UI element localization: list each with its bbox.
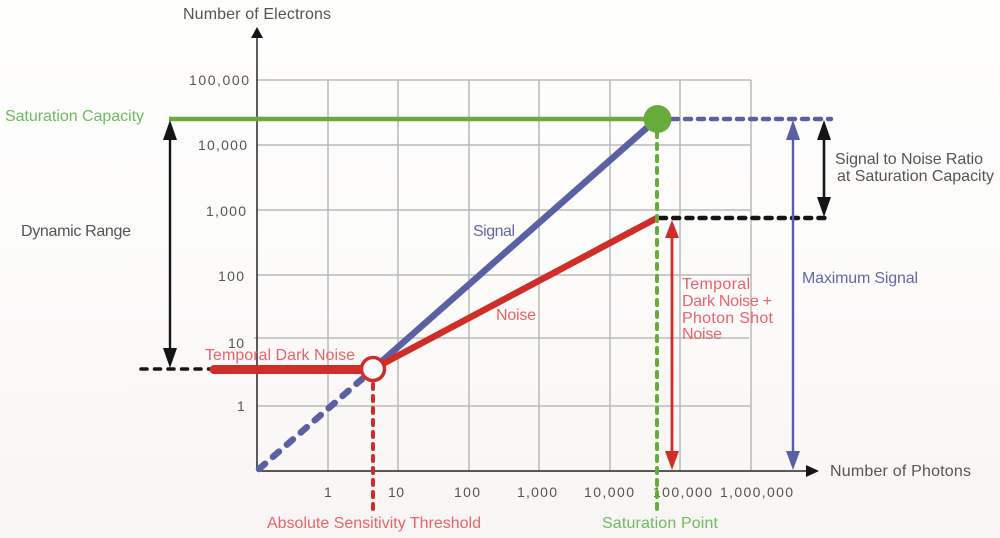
signal line dashed section [259, 379, 362, 469]
saturation point dashed drop line [655, 132, 659, 511]
x axis tick labels: 1,000,000 [720, 484, 793, 500]
signal dashed extension [672, 117, 831, 121]
maximum signal arrow [786, 120, 800, 470]
x axis with arrow [257, 465, 819, 477]
temporal dark noise plus shot noise label: Noise [682, 326, 722, 343]
saturation capacity line [169, 117, 657, 121]
signal to noise ratio arrow [817, 120, 831, 217]
temporal dark noise plus shot noise arrow [665, 220, 679, 470]
temporal dark noise plus shot noise label: Dark Noise + [682, 293, 772, 310]
absolute sensitivity threshold label: Absolute Sensitivity Threshold [267, 515, 481, 532]
signal to noise ratio label: at Saturation Capacity [837, 168, 994, 185]
x axis tick labels: 100 [454, 484, 480, 500]
chart grid [254, 80, 751, 471]
y axis title: Number of Electrons [183, 6, 331, 23]
y axis tick labels [189, 72, 249, 414]
temporal dark noise label: Temporal Dark Noise [205, 347, 355, 364]
signal to noise ratio label: Signal to Noise Ratio [835, 151, 983, 168]
x axis tick labels: 10 [388, 484, 404, 500]
x axis tick labels: 1,000 [517, 484, 557, 500]
temporal dark noise plus shot noise label: Temporal [682, 276, 750, 293]
x axis tick labels: 1 [324, 484, 332, 500]
signal label: Signal [473, 223, 515, 240]
temporal dark noise bar [214, 365, 373, 374]
y axis tick labels: 1 [237, 398, 245, 414]
saturation capacity label: Saturation Capacity [5, 108, 144, 125]
noise label: Noise [496, 307, 536, 324]
signal line solid section [373, 125, 650, 369]
saturation point label: Saturation Point [602, 515, 719, 532]
x axis title: Number of Photons [830, 463, 971, 480]
black dashed noise level [660, 216, 827, 220]
signal to noise ratio label [835, 151, 994, 185]
absolute sensitivity dashed drop line [371, 384, 375, 509]
absolute sensitivity threshold point [362, 358, 384, 380]
y axis tick labels: 1,000 [206, 203, 246, 219]
x axis tick labels [324, 484, 793, 500]
noise line [373, 218, 657, 369]
y axis tick labels: 100,000 [189, 72, 249, 88]
y axis tick labels: 100 [218, 268, 244, 284]
dynamic range arrow [163, 120, 177, 368]
y axis tick labels: 10 [228, 335, 244, 351]
x axis tick labels: 100,000 [653, 484, 712, 500]
maximum signal label: Maximum Signal [802, 270, 918, 287]
temporal dark noise plus shot noise label: Photon Shot [682, 310, 774, 327]
saturation point marker [644, 105, 672, 133]
temporal dark noise plus shot noise label [682, 276, 774, 343]
dynamic range label: Dynamic Range [21, 223, 131, 240]
y axis with arrow [251, 27, 263, 471]
x axis tick labels: 10,000 [584, 484, 634, 500]
y axis tick labels: 10,000 [198, 137, 247, 153]
black dashed level at dark noise [141, 367, 212, 371]
